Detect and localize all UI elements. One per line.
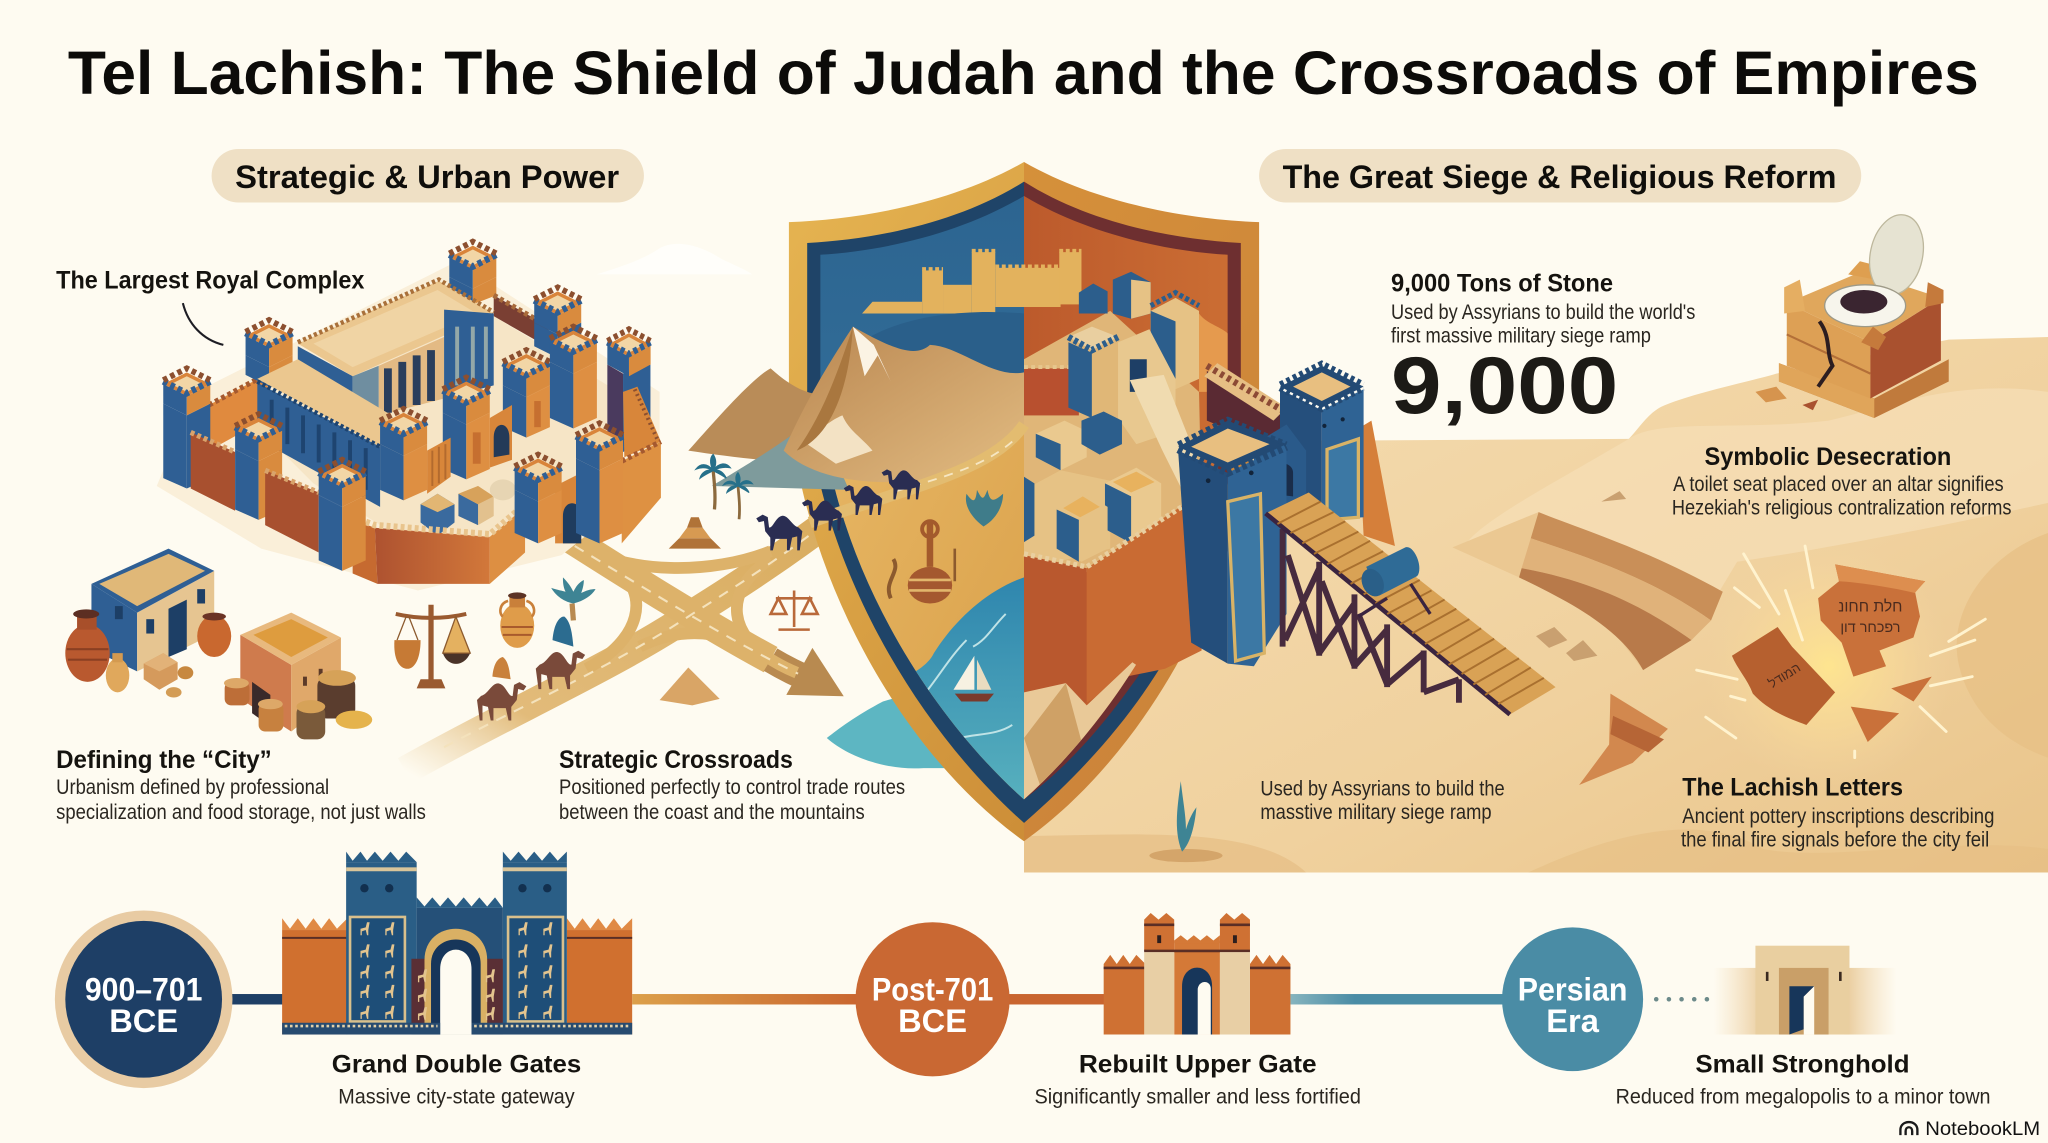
- icon: step pyramid: [669, 517, 721, 549]
- text: Defining the City: Defining the “City”: [56, 747, 272, 774]
- shield right border: [1024, 162, 1260, 842]
- illustration: granary and barrels: [224, 613, 372, 739]
- clay jars: [65, 624, 110, 682]
- icon: small scales: [771, 590, 818, 630]
- label: The Largest Royal Complex: The Largest Royal Complex: [56, 268, 365, 295]
- long terrace: [257, 359, 392, 447]
- text: Rebuilt Upper Gate: [1034, 1051, 1361, 1109]
- text: Strategic Crossroads: between the coast and the mountains: [559, 801, 865, 824]
- timeline node: Post-701 BCE: Post-701: [872, 971, 993, 1008]
- rays: [1697, 546, 1985, 758]
- text: 9,000 Tons of Stone: [1391, 270, 1695, 431]
- grain pile: [336, 711, 372, 729]
- palace faces: [298, 346, 353, 425]
- connecting wall and arch: [1254, 425, 1306, 523]
- timeline node: Persian Era: [1502, 927, 1643, 1071]
- south wall: [353, 520, 377, 584]
- courtyard: [248, 294, 640, 549]
- text: ramp caption: masstive military siege ramp: [1260, 801, 1492, 824]
- glow: [1704, 542, 1953, 790]
- text: 9,000 Tons of Stone: first massive military siege ramp: [1391, 324, 1651, 347]
- text: The Lachish Letters: Ancient pottery inscriptions describing: [1682, 805, 1994, 828]
- central arch: [411, 959, 503, 1035]
- illustration: royal complex fortress: [157, 242, 661, 590]
- timeline node: Persian Era: Persian: [1518, 971, 1627, 1008]
- path on hill: [1130, 375, 1202, 516]
- text: Grand Double Gates: [332, 1051, 581, 1109]
- mountain road in shield: [810, 425, 1024, 523]
- inner huts: [421, 494, 455, 536]
- heading: Strategic and Urban Power: [212, 149, 644, 203]
- back maroon wall: [1207, 371, 1280, 451]
- sea: [916, 577, 1024, 800]
- timeline node: 900-701 BCE: BCE: [109, 1002, 178, 1039]
- illustration: grand double gates: [282, 852, 632, 1035]
- text: The Lachish Letters: the final fire signals before the city feil: [1681, 828, 1989, 851]
- altar left face: [1787, 303, 1870, 398]
- battering ram: [1357, 547, 1430, 617]
- illustration: siege gate towers: [1178, 363, 1395, 666]
- illustration: excavation strata: [1452, 491, 1723, 670]
- toilet seat: [1825, 285, 1906, 327]
- title: Tel Lachish: The Shield of Judah and the Crossroads of Empires: [68, 39, 1979, 108]
- heading: The Great Siege and Religious Reform: The Great Siege & Religious Reform: [1283, 158, 1836, 195]
- far left tower and walls: [163, 368, 210, 489]
- icon: amphora: [500, 592, 534, 648]
- orange back wall: [1358, 421, 1395, 546]
- illustration: Lachish letters pottery: רפכחר דון: [1840, 620, 1900, 636]
- sailboat: [953, 656, 994, 701]
- timeline connectors: [222, 994, 1505, 1004]
- ramp supports: [1283, 529, 1459, 703]
- text: Symbolic Desecration: [1672, 444, 2011, 520]
- text: Grand Double Gates: Massive city-state gateway: [338, 1086, 575, 1109]
- heading: Strategic and Urban Power: Strategic & Urban Power: [235, 158, 619, 195]
- text: ramp caption: [1260, 777, 1505, 824]
- logo: NotebookLM: NotebookLM: [1925, 1118, 2040, 1140]
- ground shadow: [157, 261, 660, 590]
- illustration: Lachish letters pottery: חלת חחונ: [1838, 598, 1902, 615]
- center towers: [503, 350, 550, 438]
- upper pot: [1818, 564, 1925, 677]
- toilet lid: [1863, 210, 1930, 300]
- text: The Lachish Letters: The Lachish Letters: [1682, 774, 1903, 801]
- sea outflow behind shield: [827, 692, 967, 768]
- text: Small Stronghold: [1616, 1051, 1991, 1109]
- text: Rebuilt Upper Gate: Significantly smaller and less fortified: [1034, 1086, 1361, 1109]
- text: Defining the City: [56, 747, 426, 824]
- text: Small Stronghold: Reduced from megalopolis to a minor town: [1616, 1086, 1991, 1109]
- arrowhead: [786, 648, 844, 696]
- icon: desert plant: [1149, 781, 1223, 862]
- palace roof: [298, 281, 494, 376]
- tiled panels: [350, 917, 405, 1021]
- heading: The Great Siege and Religious Reform: [1259, 149, 1861, 203]
- timeline node: Post-701 BCE: [856, 922, 1010, 1076]
- illustration: storage house and pots: [65, 549, 231, 698]
- timeline node: 900-701 BCE: 900–701: [85, 971, 202, 1008]
- altar right face: [1870, 298, 1941, 398]
- illustration: rebuilt upper gate: [1104, 913, 1290, 1035]
- houses: [1024, 412, 1161, 562]
- base frieze: [282, 1023, 440, 1035]
- back tower: [449, 242, 496, 304]
- illustration: small stronghold: [1714, 946, 1896, 1035]
- timeline node: Post-701 BCE: BCE: [898, 1002, 967, 1039]
- text: Strategic Crossroads: [559, 747, 905, 824]
- text: Strategic Crossroads: Strategic Crossroads: [559, 747, 793, 774]
- upper keep: [1068, 342, 1092, 418]
- cloud behind shield: [597, 244, 752, 274]
- text: Rebuilt Upper Gate: Rebuilt Upper Gate: [1079, 1051, 1317, 1078]
- great rust wall: [1024, 555, 1087, 703]
- agave plant: [966, 490, 1003, 526]
- text: 9,000 Tons of Stone: Used by Assyrians to build the world's: [1391, 301, 1695, 324]
- illustration: Lachish letters pottery: המודל: [1766, 660, 1803, 691]
- label: The Largest Royal Complex: [56, 268, 365, 345]
- timeline node: 900-701 BCE: [55, 910, 232, 1088]
- dotted connector: [1656, 998, 1714, 1001]
- text: Symbolic Desecration: Symbolic Desecration: [1704, 444, 1951, 471]
- right hillside: [1024, 311, 1202, 572]
- text: Defining the City: Urbanism defined by professional: [56, 776, 329, 799]
- distant gold fortress: [862, 251, 1081, 314]
- emblem: central shield: [688, 162, 1259, 841]
- gatehouse: [555, 473, 581, 543]
- lower pot: [1732, 627, 1835, 725]
- callout line: [183, 303, 223, 345]
- east wall: [622, 442, 661, 543]
- trade roads: [405, 516, 844, 771]
- back wall right: [494, 295, 549, 348]
- panel: desert sand ground: [1024, 337, 2048, 873]
- back-left tower and wall: [209, 374, 268, 451]
- gate towers: [346, 862, 417, 1035]
- shield left border: [788, 162, 1024, 842]
- illustration: broken cliff shard: [1579, 694, 1668, 785]
- icon: dune rock: [660, 668, 720, 705]
- text: Strategic Crossroads: Positioned perfectly to control trade routes: [559, 776, 905, 799]
- icon: balance scales: [394, 605, 470, 688]
- mountains: [688, 327, 1024, 490]
- illustration: Lachish letters pottery: [1697, 542, 1985, 790]
- text: Defining the City: specialization and food storage, not just walls: [56, 801, 426, 824]
- caravan camels: [756, 469, 920, 550]
- text: 9,000 Tons of Stone: 9,000 Tons of Stone: [1391, 270, 1613, 297]
- shield field: [820, 196, 1228, 800]
- altar top: [1787, 272, 1941, 342]
- text: Small Stronghold: Small Stronghold: [1695, 1051, 1910, 1078]
- barrels: [224, 670, 356, 739]
- upper blue houses: [1079, 284, 1108, 314]
- text: Grand Double Gates: Grand Double Gates: [332, 1051, 581, 1078]
- icon: riders on camels: [477, 617, 585, 721]
- illustration: hilltop city on shield: [1024, 272, 1202, 810]
- pottery symbols: [889, 521, 955, 604]
- timeline node: Persian Era: Era: [1546, 1002, 1600, 1039]
- sand peaks bottom of shield: [1024, 662, 1136, 800]
- tower A: [1178, 451, 1228, 664]
- icon: desert palms: [696, 455, 752, 519]
- illustration: altar with toilet seat: [1755, 210, 1949, 418]
- altar crack: [1818, 321, 1832, 387]
- illustration: siege ramp: [1266, 492, 1556, 715]
- blue hill: [872, 312, 1024, 373]
- altar base: [1779, 359, 1949, 418]
- icon: palm shrub: [551, 577, 596, 620]
- text: The Lachish Letters: [1681, 774, 1994, 851]
- text: ramp caption: Used by Assyrians to build the: [1260, 777, 1505, 800]
- shards: [1891, 677, 1932, 701]
- sand field: [835, 434, 1024, 800]
- tower B: [1280, 389, 1322, 520]
- text: Symbolic Desecration: A toilet seat placed over an altar signifies: [1673, 473, 2004, 496]
- distant hill tint: [1199, 314, 1228, 392]
- big number: 9,000: [1391, 341, 1618, 431]
